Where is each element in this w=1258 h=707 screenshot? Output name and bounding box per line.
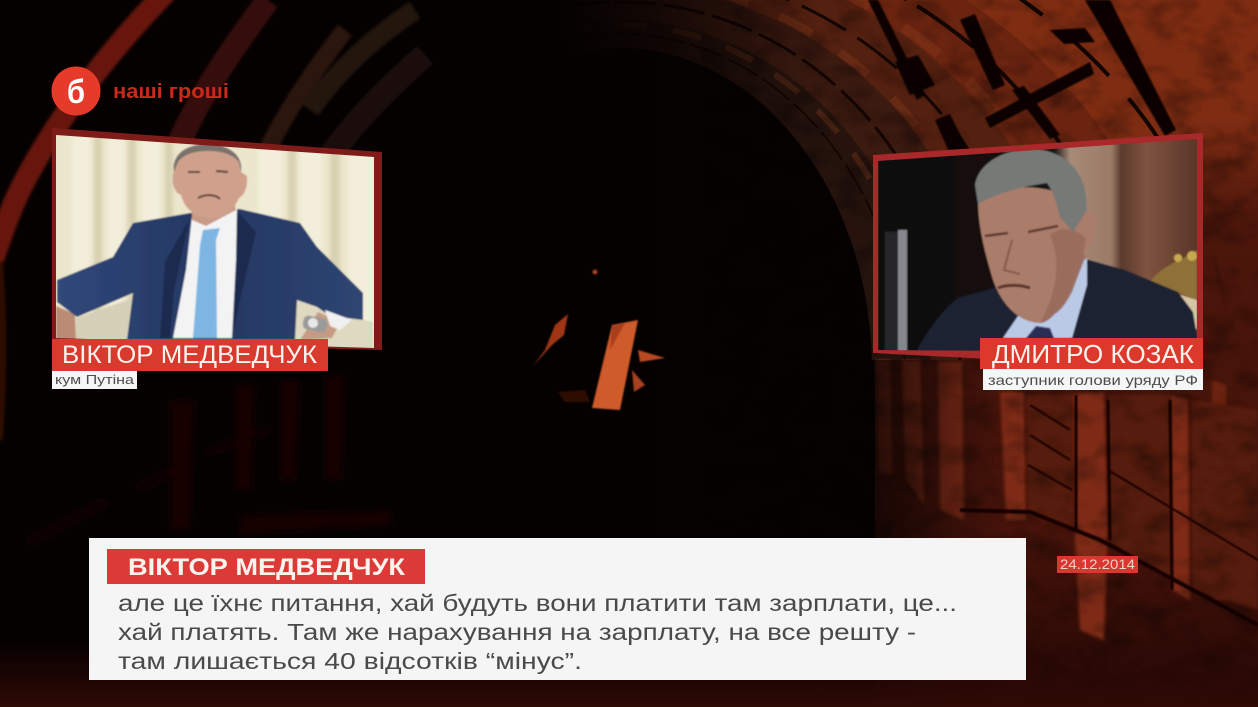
logo text: наші гроші xyxy=(113,81,229,103)
jacket xyxy=(915,258,1197,355)
neck and head xyxy=(190,206,237,226)
glowing rubble in tunnel center xyxy=(533,270,665,410)
tunnel vault: brick rings xyxy=(614,0,1258,691)
label: Kozak caption xyxy=(983,369,1203,390)
eyes and mouth xyxy=(188,171,228,199)
neck and face xyxy=(1054,254,1086,314)
right wall beyond frame xyxy=(1203,137,1258,360)
left fade over vault xyxy=(8,0,560,370)
label: Viktor Medvedchuk name: ВІКТОР МЕДВЕДЧУК xyxy=(62,341,317,369)
hair xyxy=(975,149,1087,232)
icon: red circle logo: б xyxy=(67,73,85,110)
brick courses xyxy=(636,0,1206,360)
lapel shading xyxy=(160,210,256,338)
label: Medvedchuk caption: кум Путіна xyxy=(55,372,135,387)
tie xyxy=(1026,326,1054,338)
eyes, nose, mouth xyxy=(985,226,1058,236)
faint lower left pillars xyxy=(166,378,388,532)
icon: red circle logo xyxy=(52,66,100,116)
mottled grime xyxy=(734,0,1258,664)
wall dark seams xyxy=(960,395,1258,625)
date stamp: 24.12.2014 xyxy=(1060,556,1135,572)
speaker tag xyxy=(107,549,425,584)
suit xyxy=(57,209,363,340)
label: Medvedchuk caption xyxy=(52,371,137,389)
quote text xyxy=(118,590,957,674)
quote text: але це їхнє питання, хай будуть вони платити там зарплати, це... xyxy=(118,590,957,616)
chair xyxy=(1148,250,1197,300)
shirt xyxy=(173,208,237,338)
wall pillars xyxy=(876,360,1228,640)
floor glow xyxy=(0,654,1258,707)
quote text: там лишається 40 відсотків “мінус”. xyxy=(118,648,582,674)
hair xyxy=(174,144,241,172)
photo: Medvedchuk xyxy=(50,130,380,355)
wall fade to dark xyxy=(874,360,978,684)
panel: transcript quote xyxy=(89,538,1026,680)
panel: Medvedchuk portrait xyxy=(50,128,382,355)
speaker tag: ВІКТОР МЕДВЕДЧУК xyxy=(128,554,405,581)
cuff and watch xyxy=(300,312,340,340)
dark cracks and girders xyxy=(868,0,1176,154)
hand left xyxy=(56,306,76,340)
logo: channel mark and name xyxy=(52,66,229,116)
lower wall xyxy=(870,360,1258,707)
left arch ribs xyxy=(0,0,425,440)
quote text: хай платять. Там же нарахування на зарплату, на все решту - xyxy=(118,619,916,645)
label: Kozak caption: заступник голови уряду РФ xyxy=(988,372,1198,388)
sofa xyxy=(76,300,130,339)
label: Dmitro Kozak name: ДМИТРО КОЗАК xyxy=(992,339,1194,369)
photo: Kozak xyxy=(878,135,1198,355)
shirt xyxy=(1003,258,1087,338)
door edge xyxy=(898,230,907,352)
panel: Kozak portrait xyxy=(873,133,1203,370)
tie xyxy=(193,228,220,338)
